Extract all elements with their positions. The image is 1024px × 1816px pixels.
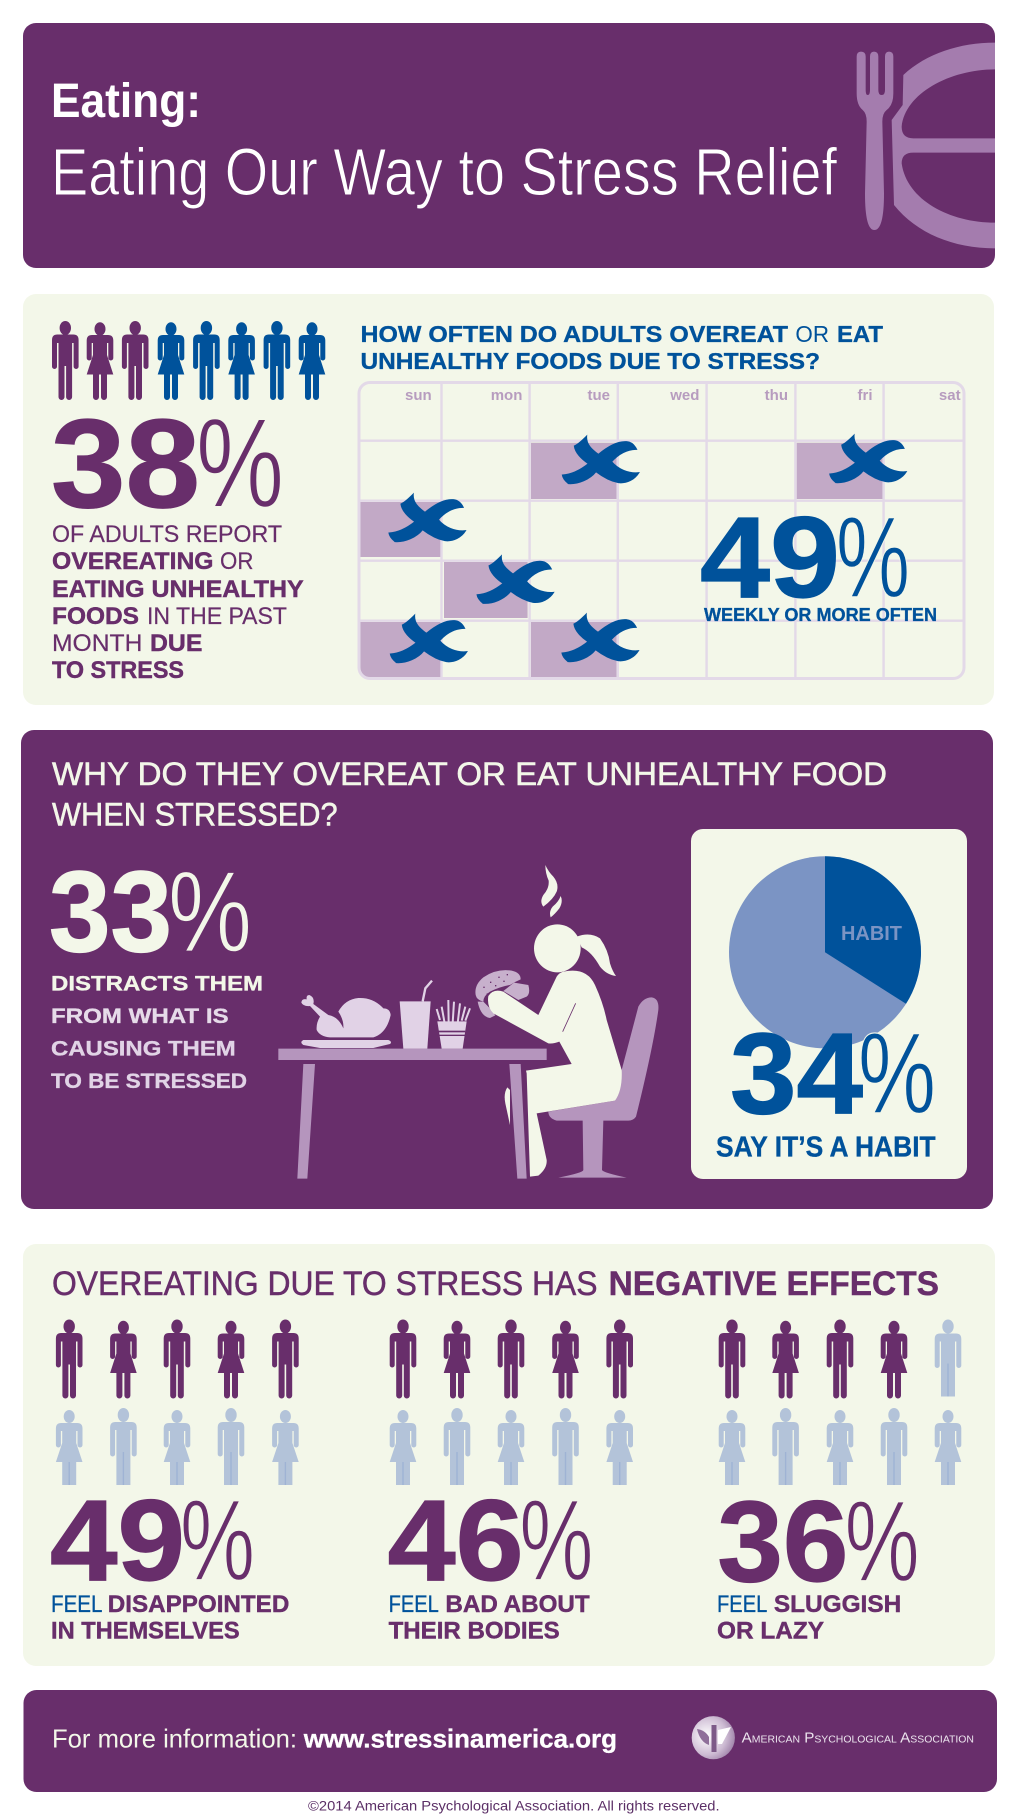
heading: how often: HOW OFTEN DO ADULTS OVEREAT bbox=[360, 321, 788, 347]
stat: 46 percent: % bbox=[519, 1477, 593, 1605]
heading: how often: EAT bbox=[837, 321, 883, 347]
stat: 33 percent: % bbox=[168, 848, 252, 976]
illustration: roast chicken on plate bbox=[301, 995, 391, 1048]
heading: negative effects bbox=[52, 1265, 939, 1303]
pie label: HABIT bbox=[841, 922, 902, 945]
heading: how often bbox=[360, 321, 883, 374]
stat: 33 percent bbox=[49, 848, 252, 976]
calendar: day labels: fri bbox=[858, 387, 872, 404]
text: 38 percent description: EATING UNHEALTHY bbox=[52, 576, 304, 603]
text: 38 percent description: MONTH bbox=[52, 630, 142, 657]
stat: 49 percent weekly: 49 bbox=[700, 494, 840, 622]
text: 38 percent description bbox=[52, 521, 304, 684]
title: Eating Our Way to Stress Relief: Eating Our Way to Stress Relief bbox=[51, 135, 837, 210]
text: feel bad about bodies: FEEL bbox=[389, 1591, 439, 1618]
text: 38 percent description: IN THE PAST bbox=[147, 603, 287, 630]
text: feel disappointed bbox=[51, 1591, 289, 1645]
stat: 34 percent bbox=[730, 1010, 936, 1138]
stat: 38 percent bbox=[51, 392, 284, 534]
text: distraction bbox=[51, 972, 263, 1093]
stat: 34 percent: % bbox=[858, 1010, 936, 1138]
stat: 49 percent weekly: WEEKLY OR MORE OFTEN bbox=[704, 604, 937, 625]
text: feel bad about bodies: BAD ABOUT bbox=[445, 1591, 590, 1618]
illustration: steam bbox=[541, 865, 562, 917]
illustration: fries bbox=[437, 1000, 470, 1049]
text: distraction: TO BE STRESSED bbox=[51, 1069, 247, 1093]
stat: 36 percent: 36 bbox=[717, 1478, 848, 1606]
icon row: eight people bbox=[52, 321, 325, 400]
illustration: cup with straw bbox=[400, 981, 432, 1049]
text: feel sluggish bbox=[717, 1591, 901, 1645]
text: feel bad about bodies: THEIR BODIES bbox=[389, 1618, 560, 1645]
text: 38 percent description: FOODS bbox=[52, 603, 139, 630]
calendar: day labels: tue bbox=[588, 387, 610, 404]
panel: habit bbox=[691, 829, 967, 1179]
calendar: blue X marks bbox=[389, 435, 906, 663]
heading: how often: UNHEALTHY FOODS DUE TO STRESS? bbox=[360, 348, 820, 374]
title: Eating: Eating: bbox=[51, 75, 201, 128]
text: feel bad about bodies bbox=[389, 1591, 590, 1645]
text: distraction: DISTRACTS THEM bbox=[51, 972, 263, 996]
icon: APA logo bbox=[692, 1716, 735, 1759]
heading: why bbox=[52, 756, 887, 833]
icon: plate bbox=[892, 43, 995, 248]
icon grid: 36 percent people bbox=[719, 1320, 961, 1485]
text: feel disappointed: IN THEMSELVES bbox=[51, 1618, 240, 1645]
chart: calendar bbox=[358, 382, 965, 679]
illustration: woman bbox=[488, 924, 622, 1177]
text: 38 percent description: OVEREATING bbox=[52, 548, 214, 575]
text: feel sluggish: FEEL bbox=[717, 1591, 767, 1618]
text: distraction: FROM WHAT IS bbox=[51, 1004, 229, 1028]
text: copyright: ©2014 American Psychological Association. All rights reserved. bbox=[308, 1798, 720, 1814]
column: disappointed bbox=[50, 1320, 299, 1645]
stat: 33 percent: 33 bbox=[49, 848, 172, 976]
stat: 46 percent: 46 bbox=[388, 1477, 524, 1605]
stat: 49 percent bbox=[50, 1477, 255, 1605]
text: 38 percent description: OR bbox=[220, 548, 253, 575]
icon grid: 46 percent people bbox=[390, 1320, 633, 1485]
text: 38 percent description: OF ADULTS REPORT bbox=[52, 521, 282, 548]
calendar: day labels: wed bbox=[669, 387, 699, 404]
stat: 49 percent weekly bbox=[700, 494, 937, 625]
text: distraction: CAUSING THEM bbox=[51, 1037, 236, 1061]
panel: footer bbox=[24, 1690, 997, 1792]
stat: 38 percent: 38 bbox=[51, 393, 200, 534]
illustration: burger bbox=[475, 970, 529, 1018]
illustration: chair bbox=[548, 997, 658, 1178]
panel: why they overeat bbox=[21, 730, 993, 1209]
calendar: day labels: thu bbox=[765, 387, 788, 404]
text: say it's a habit: SAY IT’S A HABIT bbox=[716, 1132, 936, 1164]
panel: negative effects bbox=[23, 1244, 995, 1666]
heading: why: WHY DO THEY OVEREAT OR EAT UNHEALTHY FOOD bbox=[52, 756, 887, 792]
stat: 49 percent: % bbox=[180, 1477, 255, 1605]
calendar: highlighted days bbox=[359, 443, 883, 677]
text: 38 percent description: TO STRESS bbox=[52, 657, 184, 684]
text: more information bbox=[52, 1724, 617, 1754]
stat: 34 percent: 34 bbox=[730, 1010, 863, 1138]
heading: why: WHEN STRESSED? bbox=[52, 797, 338, 833]
calendar: day labels: mon bbox=[491, 387, 522, 404]
calendar: day labels: sat bbox=[939, 387, 961, 404]
illustration: woman eating at table bbox=[278, 865, 658, 1179]
text: more information: www.stressinamerica.org bbox=[303, 1724, 617, 1754]
icon: fork bbox=[857, 52, 893, 230]
text: American Psychological Association: American Psychological Association bbox=[742, 1731, 974, 1747]
column: bad about bodies bbox=[388, 1320, 633, 1645]
panel: header bbox=[23, 23, 995, 268]
heading: negative effects: OVEREATING DUE TO STRESS HAS bbox=[52, 1265, 598, 1303]
text: feel disappointed: DISAPPOINTED bbox=[108, 1591, 289, 1618]
text: feel sluggish: OR LAZY bbox=[717, 1618, 824, 1645]
chart: habit pie bbox=[729, 856, 921, 1048]
stat: 36 percent bbox=[717, 1478, 920, 1606]
icon grid: 49 percent people bbox=[56, 1320, 299, 1485]
panel: how often bbox=[23, 294, 994, 705]
stat: 46 percent bbox=[388, 1477, 593, 1605]
calendar: day labels: sun bbox=[405, 387, 432, 404]
heading: how often: OR bbox=[795, 321, 829, 347]
stat: 49 percent weekly: % bbox=[836, 494, 910, 622]
text: 38 percent description: DUE bbox=[150, 630, 202, 657]
column: sluggish bbox=[717, 1320, 961, 1645]
calendar: day labels bbox=[405, 387, 961, 404]
heading: negative effects: NEGATIVE EFFECTS bbox=[609, 1265, 939, 1303]
text: feel disappointed: FEEL bbox=[51, 1591, 102, 1618]
stat: 38 percent: % bbox=[196, 392, 284, 534]
stat: 49 percent: 49 bbox=[50, 1477, 185, 1605]
text: more information: For more information: bbox=[52, 1724, 297, 1754]
stat: 36 percent: % bbox=[845, 1478, 920, 1606]
text: feel sluggish: SLUGGISH bbox=[774, 1591, 901, 1618]
illustration: table bbox=[278, 1049, 547, 1179]
